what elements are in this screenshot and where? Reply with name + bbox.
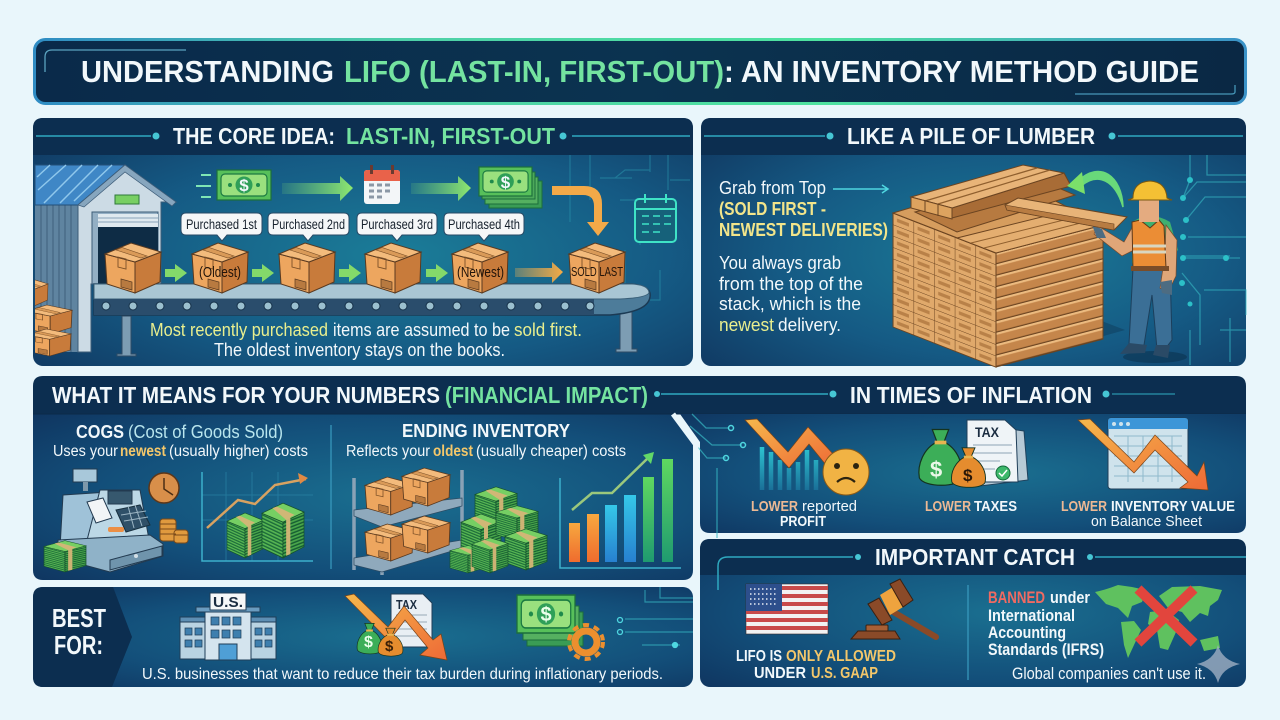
heading: financial impact: WHAT IT MEANS FOR YOUR NUMBERS — [52, 382, 440, 408]
text: you always grab: from the top of the — [719, 273, 863, 294]
icon: US building: U.S. — [213, 594, 243, 611]
icon: money and gear: $ — [540, 604, 552, 626]
box newest — [452, 243, 508, 293]
text: ending inventory: Reflects your — [346, 443, 430, 460]
heading: inflation: IN TIMES OF INFLATION — [850, 382, 1092, 408]
text: ending inventory: oldest — [433, 443, 473, 460]
text: you always grab — [719, 252, 863, 335]
icon: cash stack — [44, 541, 86, 572]
box oldest — [192, 243, 248, 293]
arrow 3 — [339, 264, 361, 282]
text: global companies: Global companies can't use it. — [1012, 665, 1206, 683]
icon: cash register — [58, 469, 163, 572]
label: lower inventory value: LOWER — [1061, 498, 1107, 515]
label: lower profit: reported — [802, 498, 857, 515]
arrow: money to calendar — [282, 176, 353, 201]
text: ending inventory — [346, 421, 626, 460]
text: you always grab: delivery. — [778, 314, 841, 335]
arrow 2 — [252, 264, 274, 282]
text: grab from top: NEWEST DELIVERIES) — [719, 220, 888, 240]
icon: neon calendar — [635, 194, 676, 242]
illustration: worker with plank — [1092, 181, 1187, 363]
label: only allowed: UNDER — [754, 665, 806, 682]
text: grab from top — [719, 178, 888, 240]
callout: purchased 4th: Purchased 4th — [448, 217, 520, 232]
text: cogs: newest — [120, 443, 166, 460]
plank held — [1005, 198, 1127, 230]
title text — [81, 54, 1199, 89]
icon: lower taxes: TAX — [975, 424, 1000, 440]
icon: lower profit — [745, 419, 869, 495]
icon: money stack — [479, 167, 542, 208]
callout: purchased 4th — [444, 213, 524, 241]
circuit nodes — [618, 618, 678, 648]
icon: tax decrease — [345, 594, 447, 660]
icon: sparkle — [1197, 645, 1240, 683]
text: cogs: (usually higher) costs — [169, 443, 308, 460]
icon: coins — [160, 519, 188, 543]
text: core description: The oldest inventory stays on the books. — [214, 340, 505, 360]
label: lower taxes: TAXES — [974, 498, 1017, 515]
panel: inflation — [680, 382, 1246, 538]
text: ending inventory: (usually cheaper) costs — [476, 443, 626, 460]
icon: curved arrow — [1067, 171, 1123, 207]
arrow 1 — [165, 264, 187, 282]
heading: lumber: LIKE A PILE OF LUMBER — [847, 123, 1095, 149]
box sold last: SOLD LAST — [571, 265, 623, 279]
text: banned: under — [1050, 589, 1090, 607]
circuit nodes — [1179, 177, 1229, 306]
arrow: orange elbow — [552, 186, 609, 236]
icon: tax decrease: TAX — [396, 597, 417, 612]
arrow: calendar to stack — [411, 176, 471, 201]
label: lower inventory value: on Balance Sheet — [1091, 513, 1203, 530]
icon: money bill: $ — [239, 176, 249, 195]
label: lower profit: LOWER — [751, 498, 798, 515]
icon: world map with cross — [1095, 585, 1222, 658]
icon: tax decrease: $ — [364, 634, 373, 651]
callout: purchased 2nd: Purchased 2nd — [272, 217, 345, 232]
circuit traces — [625, 587, 693, 645]
separator between panels — [673, 414, 696, 580]
icon: warehouse — [35, 165, 176, 352]
heading: catch: IMPORTANT CATCH — [875, 544, 1075, 570]
text: you always grab: newest — [719, 314, 774, 335]
title text: : AN INVENTORY METHOD GUIDE — [724, 54, 1199, 89]
text: core description — [150, 320, 582, 360]
chart: cogs line — [202, 472, 313, 561]
icon: money bill — [196, 170, 271, 200]
heading: core idea: LAST-IN, FIRST-OUT — [346, 123, 555, 149]
text: banned: BANNED — [988, 589, 1045, 607]
text: grab from top: (SOLD FIRST - — [719, 199, 826, 219]
panel: core idea — [18, 118, 693, 366]
icon: clock — [149, 473, 179, 503]
box 4 — [365, 243, 421, 293]
label: only allowed — [736, 648, 896, 682]
title text: LIFO (LAST-IN, FIRST-OUT) — [344, 54, 724, 89]
callout: purchased 2nd — [268, 213, 349, 241]
callout: purchased 1st: Purchased 1st — [186, 217, 257, 232]
circuit traces — [690, 414, 742, 538]
title text: UNDERSTANDING — [81, 54, 334, 89]
text: core description: Most recently purchased — [150, 320, 328, 340]
arrow: orange — [515, 262, 563, 283]
icon: conveyor belt — [94, 284, 650, 356]
circuit traces — [1182, 155, 1246, 365]
icon: shelf with boxes — [354, 468, 462, 575]
heading: core idea: THE CORE IDEA: — [173, 123, 335, 149]
joined header band — [33, 376, 1246, 414]
icon: US building — [180, 593, 276, 660]
label: only allowed: ONLY ALLOWED — [786, 648, 896, 665]
icon: lower taxes — [919, 420, 1028, 487]
box newest: (Newest) — [457, 265, 504, 281]
box 1 — [105, 243, 161, 293]
icon: lower taxes: $ — [963, 466, 973, 485]
callout: purchased 3rd: Purchased 3rd — [361, 217, 433, 232]
text: core description: items are assumed to be — [333, 320, 510, 340]
text: you always grab: You always grab — [719, 252, 841, 273]
box 3 — [279, 243, 335, 293]
label: lower inventory value — [1061, 498, 1235, 530]
heading: financial impact: (FINANCIAL IMPACT) — [445, 382, 648, 408]
panel: best for — [33, 587, 693, 687]
text: banned: International — [988, 607, 1075, 625]
icon: calendar — [364, 165, 400, 204]
label: lower inventory value: INVENTORY VALUE — [1111, 498, 1235, 515]
text: ending inventory: ENDING INVENTORY — [402, 421, 570, 441]
icon: lower inventory value — [1078, 418, 1208, 490]
text: banned: Accounting — [988, 624, 1066, 642]
panel: pile of lumber — [701, 118, 1246, 367]
label: lower taxes — [925, 498, 1017, 515]
box sold last — [569, 243, 625, 293]
panel: important catch — [700, 539, 1246, 687]
label: lower profit: PROFIT — [780, 513, 826, 530]
text: cogs — [53, 422, 308, 460]
label: only allowed: U.S. GAAP — [811, 665, 878, 682]
arrow 4 — [426, 264, 448, 282]
text: cogs: COGS — [76, 422, 124, 442]
icon: side boxes — [35, 280, 74, 356]
text: grab from top: Grab from Top — [719, 178, 826, 198]
icon: lower taxes: $ — [930, 457, 942, 482]
box oldest: (Oldest) — [199, 265, 241, 281]
label: only allowed: LIFO IS — [736, 648, 782, 665]
heading: core idea — [173, 123, 555, 149]
icon: US flag — [746, 584, 828, 634]
callout: purchased 3rd — [357, 213, 437, 241]
text: cogs: Uses your — [53, 443, 118, 460]
chart: bars — [560, 452, 681, 568]
label: lower profit — [751, 498, 857, 530]
text: banned — [988, 589, 1104, 659]
text: cogs: (Cost of Goods Sold) — [128, 422, 283, 442]
label: lower taxes: LOWER — [925, 498, 971, 515]
circuit nodes — [724, 426, 746, 460]
badge: best for — [33, 587, 132, 687]
text: you always grab: stack, which is the — [719, 293, 861, 314]
text: best for description: U.S. businesses that want to reduce their tax burden during inflationary periods. — [142, 666, 663, 683]
panel: financial impact — [33, 376, 1246, 580]
icon: tax decrease: $ — [385, 638, 394, 655]
icon: cash pile — [450, 487, 547, 573]
icon: money stack: $ — [501, 173, 511, 192]
title banner — [34, 40, 1246, 104]
illustration: lumber stack — [893, 165, 1125, 367]
callout: purchased 1st — [181, 213, 262, 241]
badge: best for: FOR: — [54, 630, 103, 660]
text: banned: Standards (IFRS) — [988, 641, 1104, 659]
icon: gavel — [851, 579, 936, 639]
text: core description: sold first. — [514, 320, 582, 340]
badge: best for: BEST — [52, 603, 106, 633]
icon: money and gear — [517, 595, 603, 659]
